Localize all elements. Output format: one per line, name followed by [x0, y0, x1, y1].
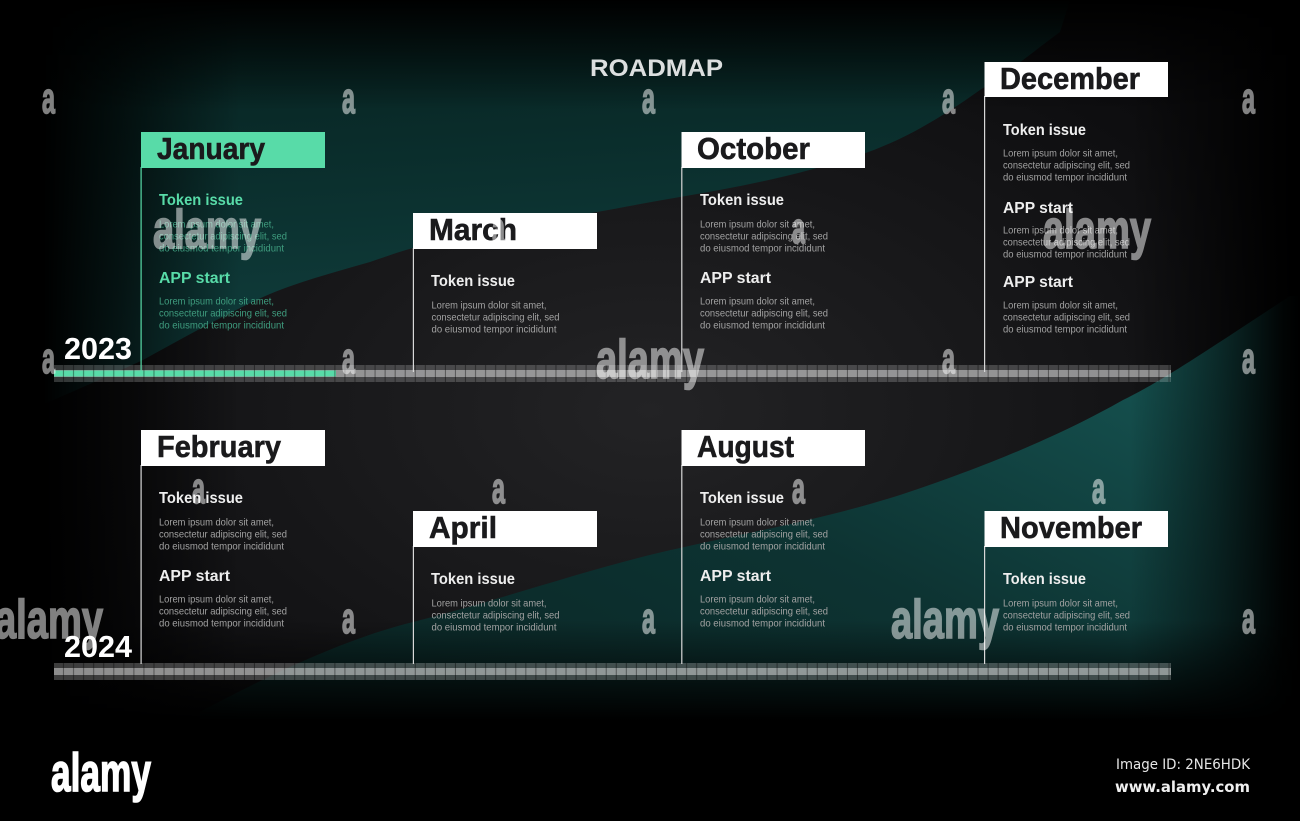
panel: April: Token issue: [431, 571, 515, 588]
panel: August: Lorem ipsum dolor sit amet,: [700, 593, 815, 605]
watermark overlay: a: [1242, 74, 1255, 123]
panel: February: [140, 429, 325, 664]
panel: October: consectetur adipiscing elit, sed: [700, 230, 828, 242]
panel: January: consectetur adipiscing elit, sed: [159, 230, 287, 242]
watermark overlay: a: [492, 204, 505, 253]
panel: April: consectetur adipiscing elit, sed: [432, 609, 560, 621]
panel: October: Lorem ipsum dolor sit amet,: [700, 295, 815, 307]
panel: October: Lorem ipsum dolor sit amet,: [700, 218, 815, 230]
panel: February: consectetur adipiscing elit, sed: [159, 605, 287, 617]
panel: February: consectetur adipiscing elit, sed: [159, 528, 287, 540]
panel: January: do eiusmod tempor incididunt: [159, 242, 284, 254]
panel: January: consectetur adipiscing elit, sed: [159, 307, 287, 319]
panel: August: August: [697, 429, 794, 464]
year label 2023: 2023: [64, 331, 132, 366]
panel: October: do eiusmod tempor incididunt: [700, 242, 825, 254]
logo: alamy: alamy: [51, 743, 151, 803]
watermark overlay: a: [792, 204, 805, 253]
panel: December: do eiusmod tempor incididunt: [1003, 323, 1127, 335]
timeline track 2024: [54, 663, 1171, 680]
panel: December: Lorem ipsum dolor sit amet,: [1003, 299, 1118, 311]
panel: January: [140, 131, 325, 372]
panel: January: January: [157, 131, 266, 166]
panel: April: April: [429, 510, 497, 545]
panel: March: Lorem ipsum dolor sit amet,: [432, 299, 546, 311]
watermark overlay: a: [1092, 464, 1105, 513]
year label 2024: 2024: [64, 629, 133, 664]
watermark overlay: a: [792, 464, 805, 513]
panel: August: do eiusmod tempor incididunt: [700, 540, 825, 552]
panel: August: Token issue: [700, 490, 784, 507]
watermark overlay: a: [942, 334, 955, 383]
panel: December: Lorem ipsum dolor sit amet,: [1003, 224, 1118, 236]
panel: February: do eiusmod tempor incididunt: [159, 617, 284, 629]
panel: October: Token issue: [700, 192, 784, 209]
panel: November: do eiusmod tempor incididunt: [1003, 621, 1127, 633]
panel: December: APP start: [1003, 274, 1074, 291]
panel: October: consectetur adipiscing elit, sed: [700, 307, 828, 319]
panel: August: APP start: [700, 568, 772, 585]
panel: February: Lorem ipsum dolor sit amet,: [159, 593, 274, 605]
panel: January: Lorem ipsum dolor sit amet,: [159, 218, 274, 230]
panel: April: [413, 510, 597, 664]
panel: October: do eiusmod tempor incididunt: [700, 319, 825, 331]
watermark overlay: a: [342, 334, 355, 383]
panel: February: Token issue: [159, 490, 243, 507]
timeline track 2023: [54, 365, 1171, 382]
panel: December: consectetur adipiscing elit, sed: [1003, 159, 1130, 171]
watermark overlay: a: [42, 74, 55, 123]
watermark overlay: a: [642, 74, 655, 123]
watermark overlay: alamy: [153, 198, 261, 260]
panel: February: APP start: [159, 568, 231, 585]
panel: February: do eiusmod tempor incididunt: [159, 540, 284, 552]
panel: October: [681, 131, 865, 372]
panel: October: APP start: [700, 270, 772, 287]
panel: December: consectetur adipiscing elit, sed: [1003, 311, 1130, 323]
watermark overlay: a: [492, 464, 505, 513]
watermark overlay: a: [942, 74, 955, 123]
watermark overlay: a: [1242, 334, 1255, 383]
panel: August: consectetur adipiscing elit, sed: [700, 605, 828, 617]
panel: December: Token issue: [1003, 122, 1086, 139]
panel: November: consectetur adipiscing elit, sed: [1003, 609, 1130, 621]
panel: November: [984, 510, 1168, 664]
panel: November: Token issue: [1003, 571, 1086, 588]
panel: December: December: [1000, 61, 1140, 96]
panel: January: Lorem ipsum dolor sit amet,: [159, 295, 274, 307]
panel: December: Lorem ipsum dolor sit amet,: [1003, 147, 1118, 159]
panel: December: do eiusmod tempor incididunt: [1003, 171, 1127, 183]
panel: February: February: [157, 429, 282, 464]
panel: March: consectetur adipiscing elit, sed: [432, 311, 560, 323]
panel: November: November: [1000, 510, 1142, 545]
watermark overlay: a: [642, 594, 655, 643]
panel: January: Token issue: [159, 192, 243, 209]
panel: April: Lorem ipsum dolor sit amet,: [432, 597, 546, 609]
panel: March: [413, 212, 597, 372]
panel: December: [984, 61, 1168, 372]
panel: March: do eiusmod tempor incididunt: [432, 323, 557, 335]
watermark overlay: a: [342, 74, 355, 123]
image id text: Image ID: 2NE6HDK: [1116, 757, 1251, 773]
panel: March: March: [429, 212, 517, 247]
panel: December: consectetur adipiscing elit, sed: [1003, 236, 1130, 248]
watermark overlay: a: [342, 594, 355, 643]
panel: August: do eiusmod tempor incididunt: [700, 617, 825, 629]
watermark overlay: a: [192, 464, 205, 513]
panel: November: Lorem ipsum dolor sit amet,: [1003, 597, 1118, 609]
panel: April: do eiusmod tempor incididunt: [432, 621, 557, 633]
title: ROADMAP: [590, 55, 723, 82]
panel: December: APP start: [1003, 200, 1074, 217]
watermark overlay: alamy: [1043, 198, 1151, 260]
watermark overlay: a: [42, 334, 55, 383]
panel: January: do eiusmod tempor incididunt: [159, 319, 284, 331]
panel: December: do eiusmod tempor incididunt: [1003, 248, 1127, 260]
watermark overlay: a: [1242, 594, 1255, 643]
watermark overlay: [0, 74, 1255, 650]
watermark overlay: alamy: [891, 588, 999, 650]
panel: January: APP start: [159, 270, 231, 287]
panel: March: Token issue: [431, 273, 515, 290]
watermark overlay: alamy: [596, 328, 704, 390]
panel: August: [681, 429, 865, 664]
panel: February: Lorem ipsum dolor sit amet,: [159, 516, 274, 528]
panel: August: Lorem ipsum dolor sit amet,: [700, 516, 815, 528]
image id text: [1115, 757, 1251, 796]
panel: August: consectetur adipiscing elit, sed: [700, 528, 828, 540]
panel: October: October: [697, 131, 810, 166]
image id text: www.alamy.com: [1115, 778, 1250, 796]
